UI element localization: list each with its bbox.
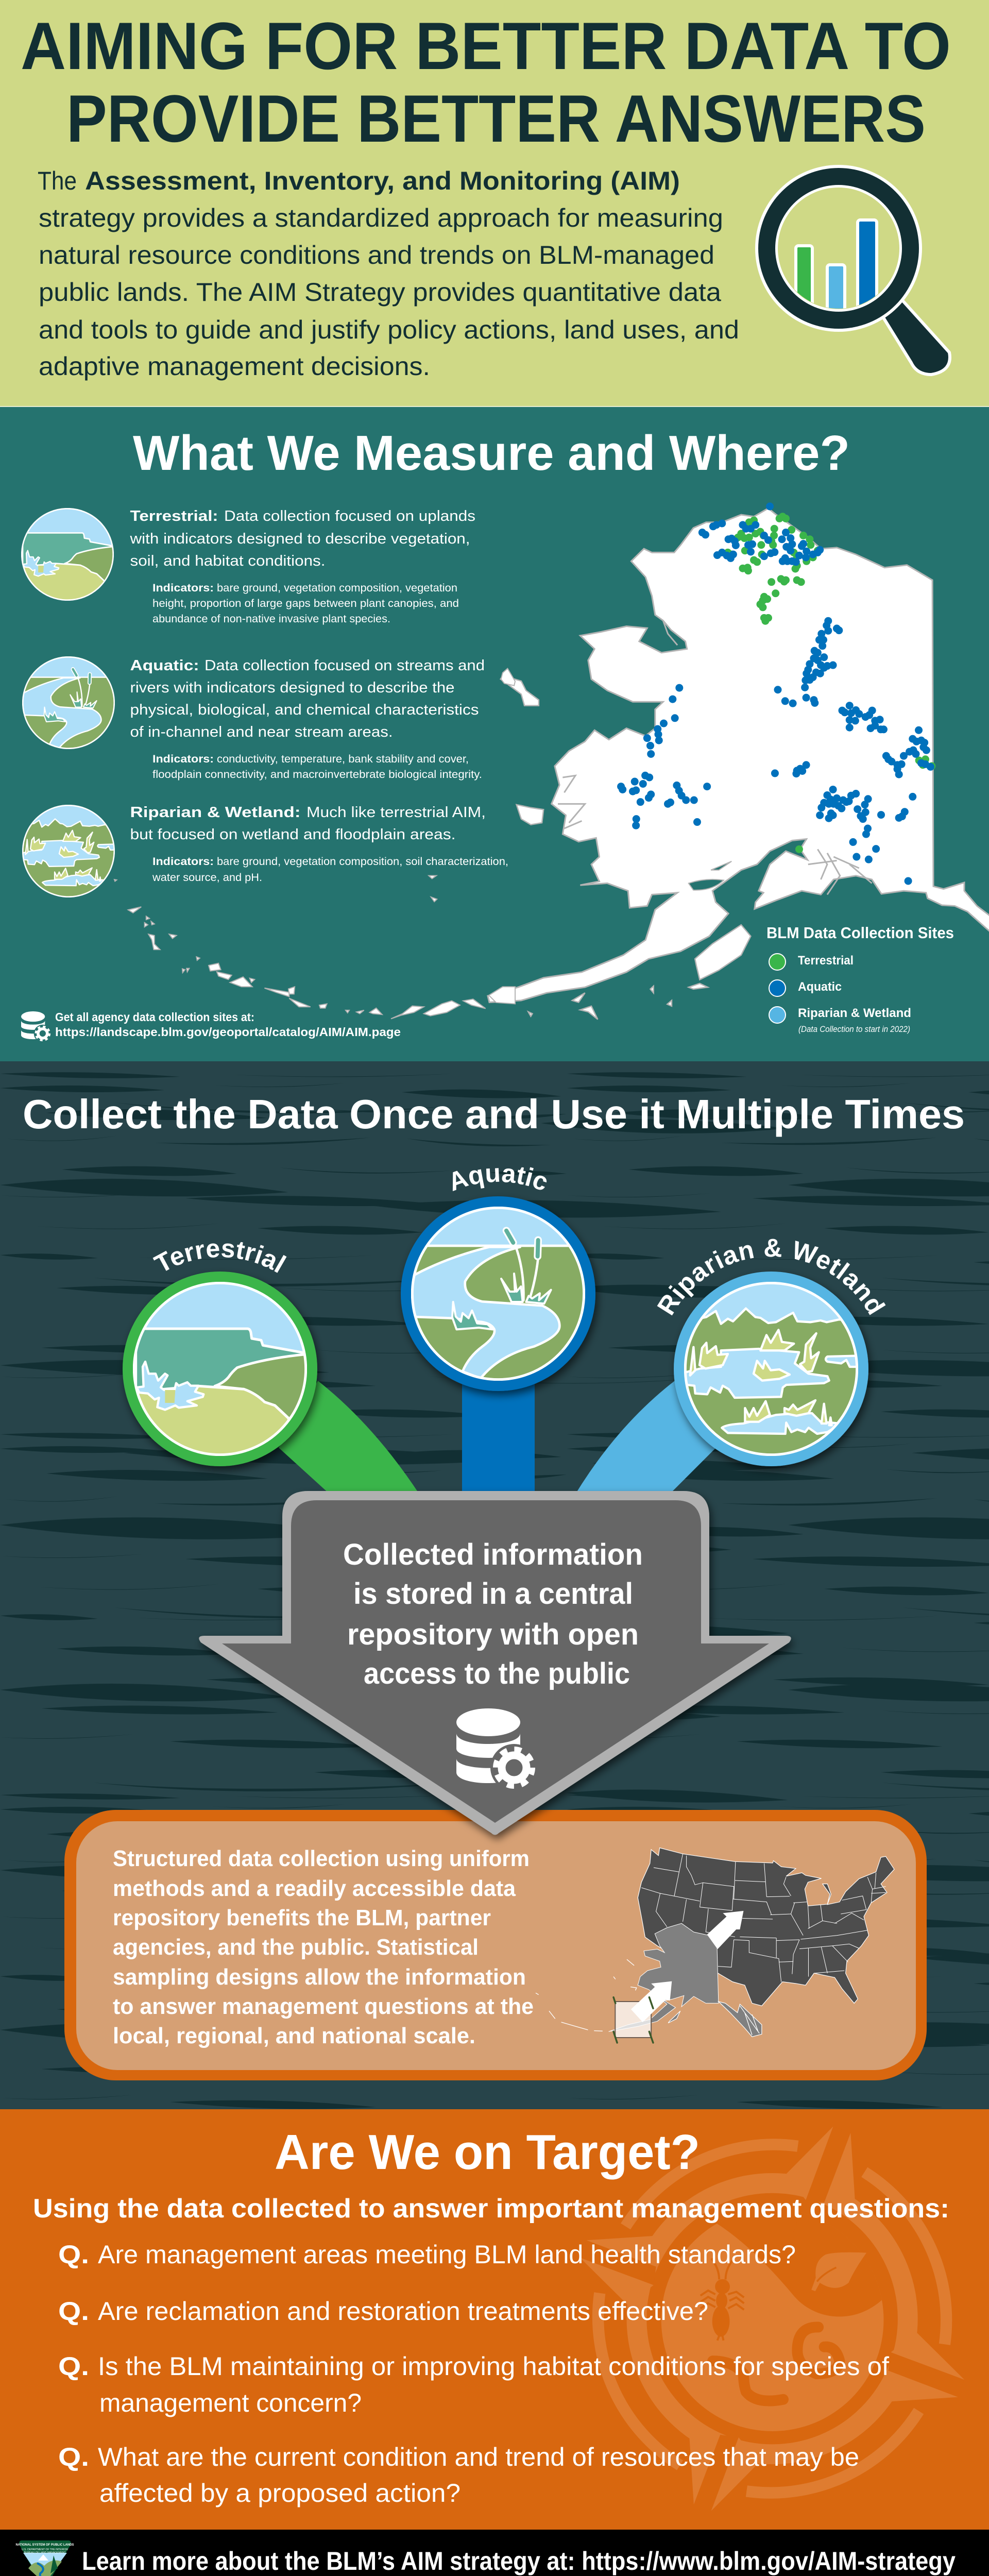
label: riparian and wetland: Riparian & Wetland [657,1239,886,1316]
callout: benefits panel [64,1810,927,2080]
icon: terrestrial circle [13,498,123,607]
terrestrial text block: soil, and habitat conditions. [130,553,326,569]
benefits text: Structured data collection using uniform [113,1846,530,1871]
arrow text: access to the public [364,1657,630,1690]
heading: Collect the Data Once and Use it Multiple Times [23,1091,965,1137]
benefits text: repository benefits the BLM, partner [113,1905,491,1930]
terrestrial text block: height, proportion of large gaps between plant canopies, and [152,598,459,609]
heading: What We Measure and Where? [133,426,850,481]
title [21,8,951,156]
panel: footer [0,2530,989,2576]
terrestrial text block: Indicators: [152,582,214,594]
badge: aquatic [397,1190,603,1400]
label: terrestrial [152,1242,286,1273]
aquatic text block: rivers with indicators designed to describe the [130,680,454,696]
question 2: Q. [58,2297,89,2326]
label: aquatic: Aquatic [452,1167,547,1191]
legend: BLM data collection sites: Terrestrial [798,954,854,968]
intro text block [38,166,739,381]
riparian and wetland text block: but focused on wetland and floodplain areas. [130,826,455,843]
panel: collect the data once [0,1061,989,2109]
intro text block: Assessment, Inventory, and Monitoring (AIM) [85,166,680,195]
benefits text: to answer management questions at the [113,1994,534,2019]
badge: riparian and wetland [670,1262,876,1468]
question 4: What are the current condition and trend of resources that may be [98,2443,859,2471]
icon: database with gear [456,1708,538,1791]
aquatic text block: floodplain connectivity, and macroinvertebrate biological integrity. [152,769,482,781]
aquatic text block: Data collection focused on streams and [204,657,485,674]
subheading: Using the data collected to answer important management questions: [33,2194,949,2224]
panel: intro header [0,0,989,407]
terrestrial text block: Terrestrial: [130,508,218,524]
question 3: management concern? [99,2388,362,2417]
question 4: affected by a proposed action? [99,2479,461,2507]
legend: BLM data collection sites: (Data Collection to start in 2022) [798,1024,910,1034]
terrestrial text block: with indicators designed to describe vegetation, [129,531,470,547]
riparian and wetland text block: Riparian & Wetland: [130,804,301,821]
legend: BLM data collection sites: Aquatic [798,980,842,994]
intro text block: natural resource conditions and trends on BLM-managed [39,241,714,269]
aquatic text block: Indicators: [152,753,214,765]
icon: BLM shield logo: BUREAU OF LAND MANAGEMENT [24,2551,66,2554]
panel: what we measure and where [0,407,989,1061]
intro text block: adaptive management decisions. [39,352,430,381]
aquatic text block: of in-channel and near stream areas. [130,724,393,740]
riparian and wetland text block: Much like terrestrial AIM, [306,804,486,821]
arrow: central repository [199,1491,791,1835]
icon: BLM shield logo: U.S. DEPARTMENT OF THE INTERIOR [22,2548,68,2551]
legend: BLM data collection sites: Riparian & Wetland [798,1006,911,1020]
label: aquatic [452,1167,547,1191]
data sites link [21,1010,401,1042]
question 2: Are reclamation and restoration treatments effective? [98,2297,708,2326]
benefits text [113,1846,534,2048]
question 4: Q. [58,2443,89,2471]
map: Alaska [114,506,989,1020]
title: PROVIDE BETTER ANSWERS [66,81,926,156]
aquatic text block [130,657,485,781]
icon: riparian and wetland circle [14,794,124,904]
aquatic text block: physical, biological, and chemical characteristics [130,702,479,718]
riparian and wetland text block: bare ground, vegetation composition, soil characterization, [217,856,508,868]
benefits text: local, regional, and national scale. [113,2023,475,2048]
benefits text: sampling designs allow the information [113,1964,526,1990]
terrestrial text block: Data collection focused on uplands [224,508,475,524]
intro text block: The [38,166,77,195]
question 4 [58,2443,859,2507]
legend: BLM data collection sites: BLM Data Collection Sites [766,924,954,942]
ribbon: riparian and wetland [575,1381,716,1494]
icon: magnifying glass with bar chart [755,165,950,375]
ribbon: terrestrial [279,1381,419,1494]
arrow text: repository with open [347,1618,639,1651]
question 1: Q. [58,2240,89,2269]
riparian and wetland text block: Indicators: [152,856,214,868]
terrestrial text block: bare ground, vegetation composition, vegetation [217,582,457,594]
map: United States with Alaska overlay [536,1848,894,2043]
icon: BLM shield logo: NATIONAL SYSTEM OF PUBLIC LANDS [15,2544,74,2547]
question 3: Is the BLM maintaining or improving habitat conditions for species of [98,2352,889,2381]
data sites link: https://landscape.blm.gov/geoportal/catalog/AIM/AIM.page [55,1025,401,1039]
legend: BLM data collection sites [766,924,954,1034]
label: terrestrial: Terrestrial [152,1242,286,1273]
panel: are we on target [0,2109,989,2530]
badge: terrestrial [118,1262,325,1468]
data sites link: Get all agency data collection sites at: [55,1010,254,1024]
arrow text: Collected information [343,1538,643,1571]
question 3: Q. [58,2352,89,2381]
riparian and wetland text block: water source, and pH. [152,872,262,884]
aquatic text block: Aquatic: [130,657,199,674]
emblem: compass watermark [580,2126,964,2511]
aquatic text block: conductivity, temperature, bank stability and cover, [217,753,469,765]
icon: aquatic circle [14,648,124,759]
benefits text: methods and a readily accessible data [113,1876,516,1901]
terrestrial text block: abundance of non-native invasive plant species. [152,613,390,625]
question 1: Are management areas meeting BLM land health standards? [98,2240,796,2269]
question list [58,2240,889,2507]
ribbon: aquatic [462,1381,535,1494]
arrow text [343,1538,643,1690]
benefits text: agencies, and the public. Statistical [113,1935,479,1960]
intro text block: strategy provides a standardized approach for measuring [39,204,723,232]
icon: database with gear [21,1011,52,1042]
heading: Are We on Target? [275,2125,700,2180]
riparian and wetland text block [130,804,508,884]
question 3 [58,2352,889,2417]
intro text block: public lands. The AIM Strategy provides quantitative data [39,278,721,307]
arrow text: is stored in a central [353,1577,633,1611]
terrestrial text block [129,508,475,625]
title: AIMING FOR BETTER DATA TO [21,8,951,83]
icon: BLM shield logo [15,2540,74,2576]
intro text block: and tools to guide and justify policy actions, land uses, and [39,315,739,344]
